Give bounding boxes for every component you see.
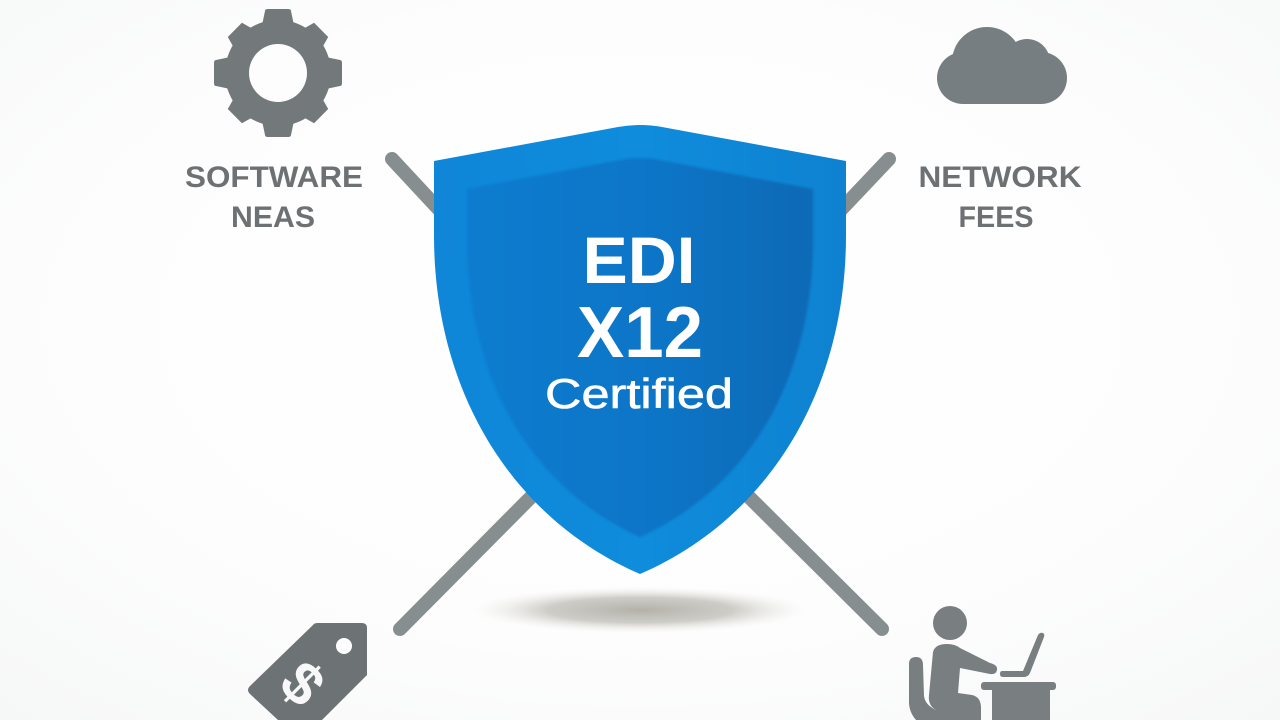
label: network fees: FEES [958, 201, 1034, 234]
shield text: EDI: EDI [582, 223, 696, 297]
shield shadow [472, 587, 808, 633]
shield text: X12: X12 [577, 293, 703, 373]
shield badge [434, 125, 846, 574]
label: software needs: NEAS [231, 201, 315, 234]
label: network fees: NETWORK [918, 161, 1082, 194]
label: software needs: SOFTWARE [185, 161, 363, 194]
icon: price tag: $ [267, 648, 338, 719]
label: network fees [918, 161, 1082, 234]
icon: person at desk [909, 606, 1056, 720]
icon: price tag [248, 623, 367, 720]
label: software needs [185, 161, 363, 234]
shield text: Certified: Certified [545, 370, 733, 417]
connector lines [392, 159, 889, 629]
icon: cloud [937, 27, 1067, 104]
icon: gear [214, 9, 342, 137]
